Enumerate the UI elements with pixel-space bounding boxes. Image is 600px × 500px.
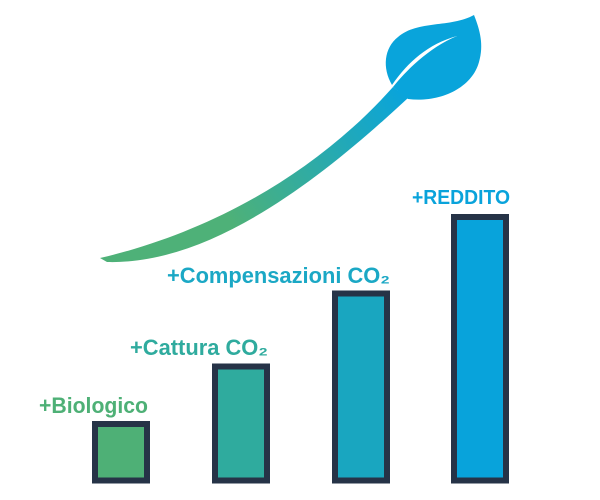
icon: growth stem and leaf <box>100 15 481 262</box>
bar: Biologico <box>95 424 147 480</box>
label: Reddito: +REDDITO <box>412 187 510 209</box>
label: Cattura CO2: +Cattura CO₂ <box>130 335 268 360</box>
bar: Cattura CO2 <box>215 366 267 480</box>
bar: Reddito <box>454 217 506 480</box>
stem <box>100 87 408 262</box>
bar: Compensazioni CO2 <box>335 294 387 480</box>
label: Compensazioni CO2: +Compensazioni CO₂ <box>167 263 390 288</box>
leaf <box>386 15 481 100</box>
label: Biologico: +Biologico <box>39 393 148 418</box>
